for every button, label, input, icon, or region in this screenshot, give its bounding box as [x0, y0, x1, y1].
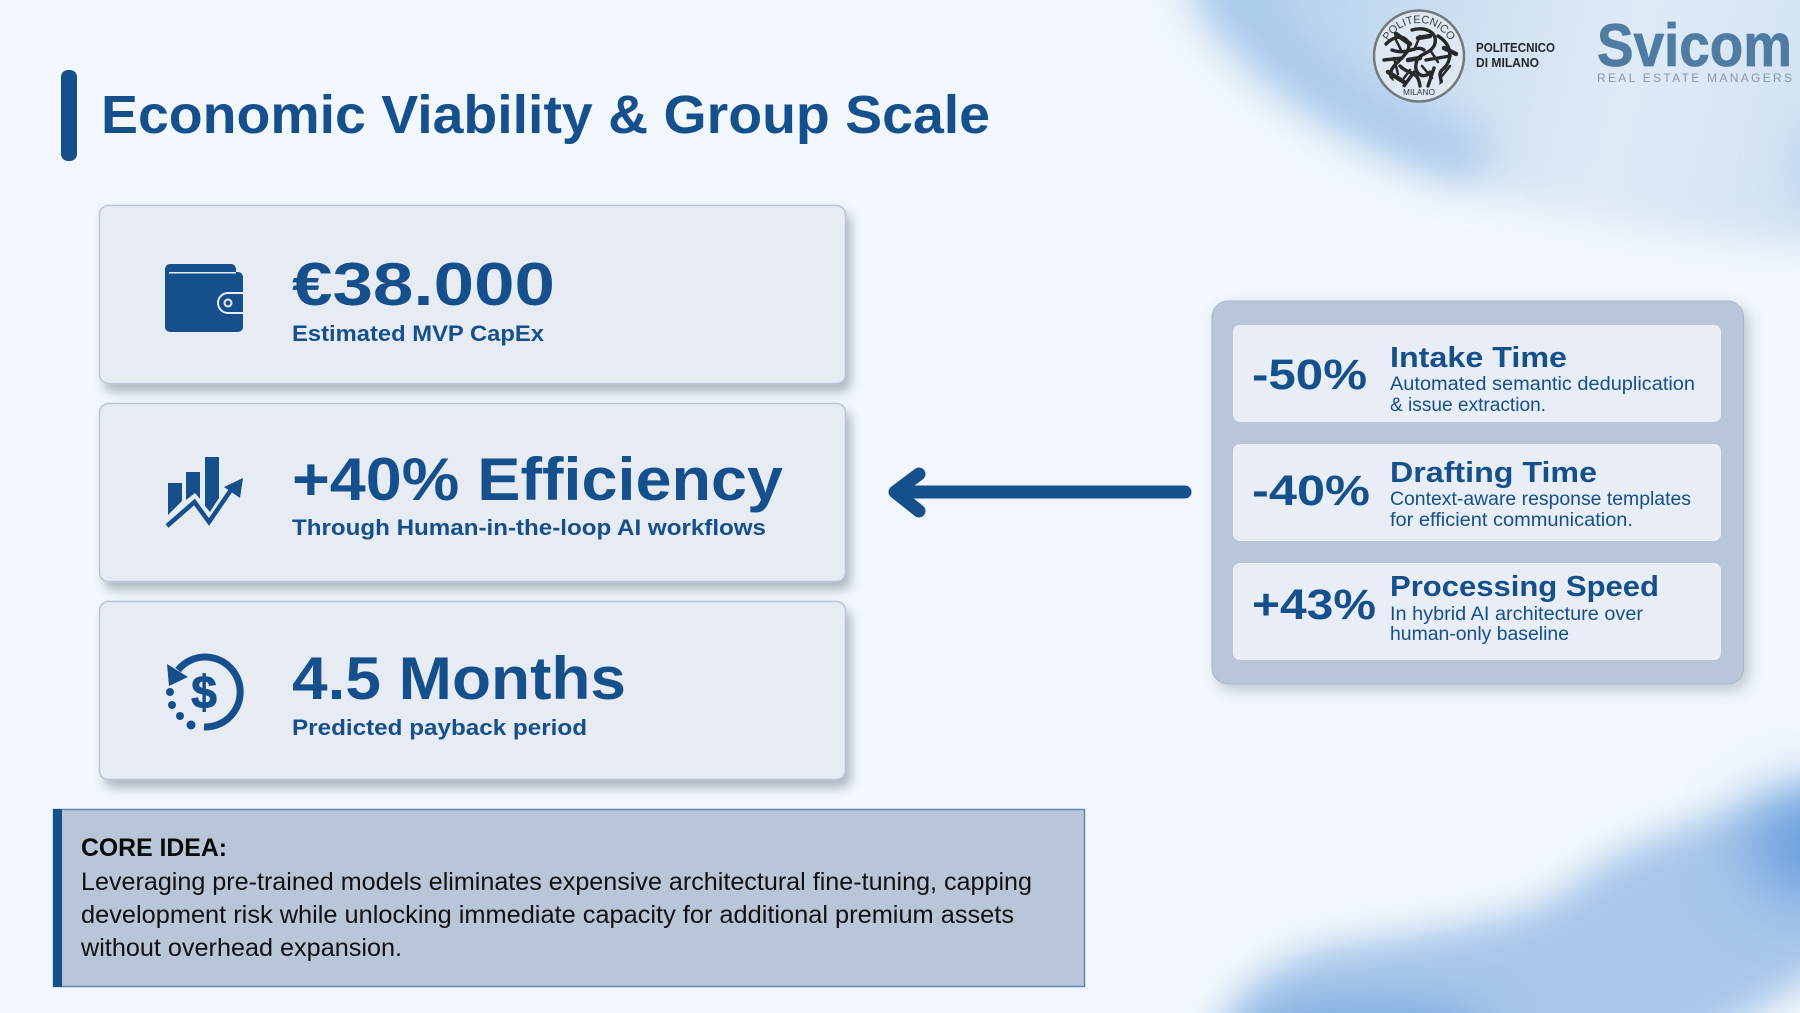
seal: [1372, 9, 1466, 103]
wordmark: POLITECNICO: [1476, 40, 1555, 55]
logo: Svicom: REAL ESTATE MANAGERS: [1597, 71, 1792, 85]
value: €38.000: [292, 251, 555, 318]
icon: payback dollar: [166, 657, 240, 730]
seal: POLITECNICO: [1382, 15, 1454, 40]
panel: payback card: [100, 602, 846, 780]
metric: drafting time: -40%: [1252, 467, 1370, 515]
metric: processing speed: Processing Speed: [1390, 571, 1659, 603]
background gradient blobs: [1185, 0, 1800, 1013]
logo: Politecnico di Milano: DI MILANO: [1476, 55, 1539, 70]
title accent bar: [61, 70, 77, 161]
metric: drafting time: Drafting Time: [1390, 457, 1597, 489]
metric: intake time: & issue extraction.: [1390, 395, 1546, 416]
metric: intake time: [1233, 325, 1721, 422]
icon: payback dollar: $: [191, 666, 217, 718]
metric: drafting time: Context-aware response templates: [1390, 489, 1691, 510]
callout: core idea: CORE IDEA:: [81, 834, 227, 862]
caption: Through Human-in-the-loop AI workflows: [292, 515, 766, 540]
metric: drafting time: for efficient communication.: [1390, 510, 1633, 531]
metric: intake time: Intake Time: [1390, 342, 1567, 374]
callout: core idea: Leveraging pre-trained models eliminates expensive architectural fine-tuning, capping: [81, 868, 1032, 896]
caption: Estimated MVP CapEx: [292, 321, 545, 346]
callout: core idea: without overhead expansion.: [80, 934, 402, 962]
panel: efficiency card: [100, 404, 846, 582]
icon: rising chart: [167, 457, 243, 526]
panel: AI metrics: [1212, 301, 1744, 684]
metric: processing speed: +43%: [1252, 581, 1376, 629]
value: 4.5 Months: [292, 645, 626, 712]
panel: CapEx card: [100, 206, 846, 384]
logo: Politecnico di Milano: [1372, 9, 1555, 103]
caption: Predicted payback period: [292, 715, 587, 740]
title: Economic Viability & Group Scale: [101, 85, 990, 145]
value: +40% Efficiency: [292, 446, 784, 513]
metric: intake time: -50%: [1252, 351, 1367, 399]
callout: core idea: [53, 809, 1084, 987]
metric: processing speed: [1233, 563, 1721, 660]
seal: MILANO: [1403, 87, 1435, 97]
metric: processing speed: In hybrid AI architecture over: [1390, 604, 1644, 625]
metric: intake time: Automated semantic deduplication: [1390, 374, 1695, 395]
callout: core idea: development risk while unlocking immediate capacity for additional premium assets: [81, 901, 1014, 929]
metric: processing speed: human-only baseline: [1390, 624, 1569, 645]
icon: wallet: [165, 264, 243, 332]
arrow: [895, 474, 1185, 511]
metric: drafting time: [1233, 444, 1721, 541]
